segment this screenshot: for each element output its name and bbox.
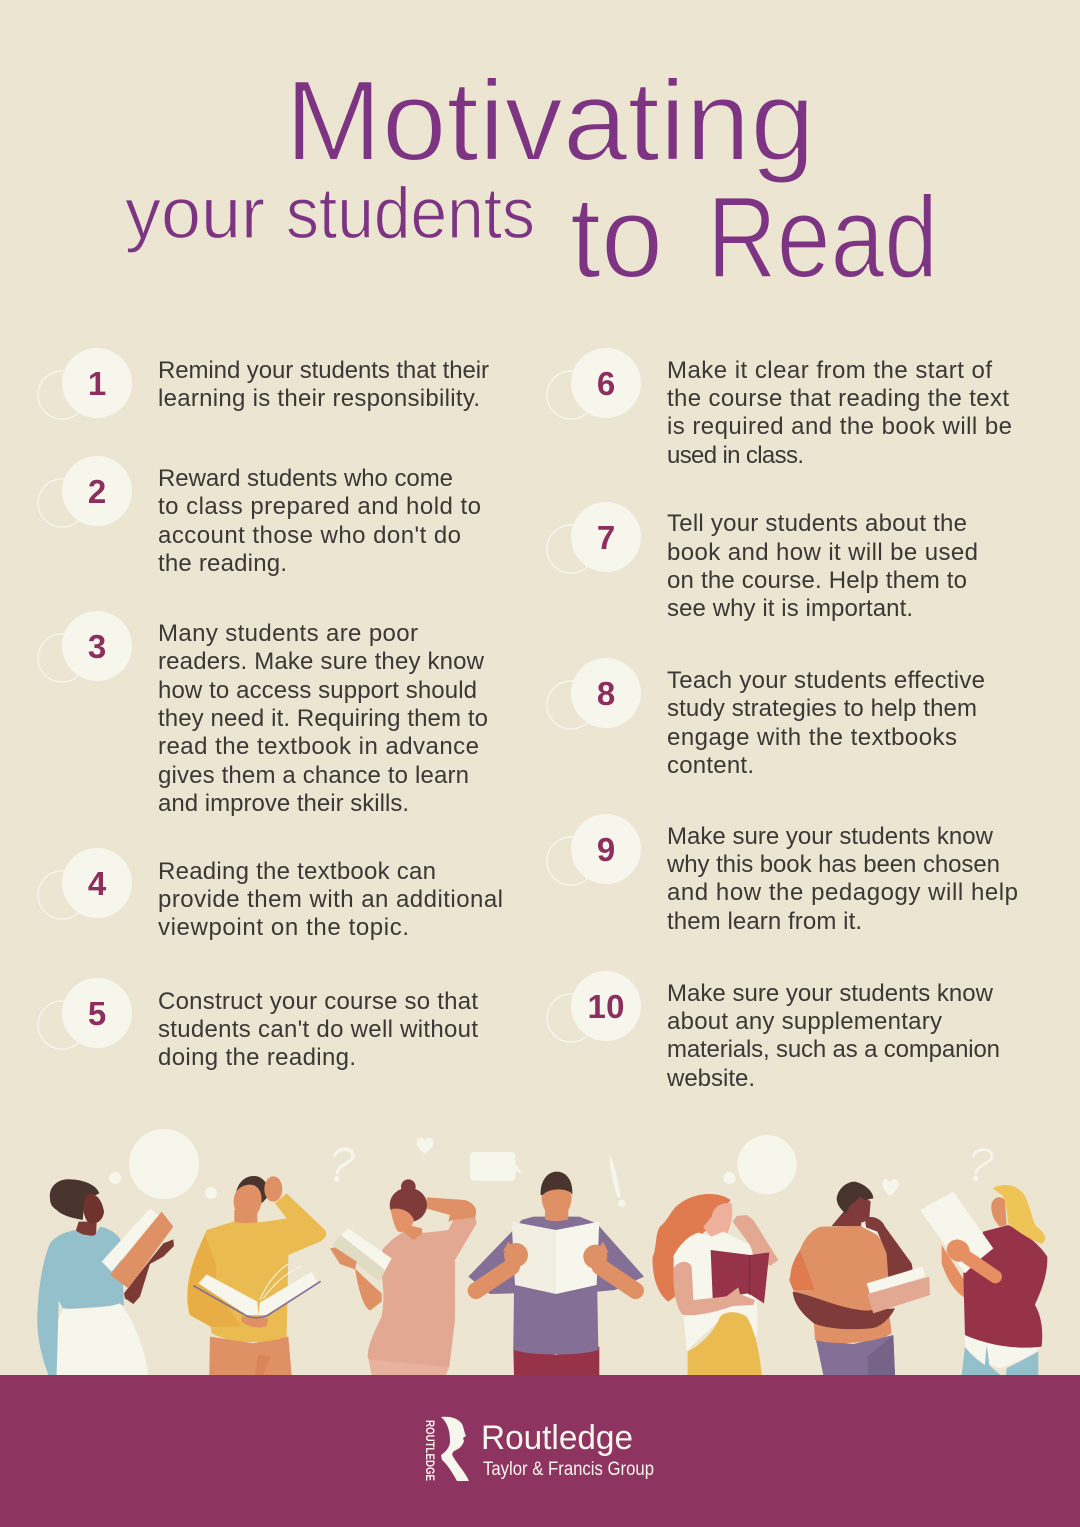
icon: number badge 2	[38, 456, 132, 527]
text: tip 3: read the textbook in advance	[158, 733, 479, 760]
text: tip 2: Reward students who come	[158, 465, 453, 492]
text: tip 1	[158, 357, 489, 412]
text: tip 10	[666, 980, 1000, 1092]
icon: number badge 1: 1	[88, 365, 106, 402]
logo: Routledge: ROUTLEDGE	[423, 1420, 435, 1481]
title: Motivating	[285, 58, 815, 185]
text: tip 3: how to access support should	[158, 677, 477, 704]
icon: question mark right	[973, 1150, 992, 1180]
text: tip 5: Construct your course so that	[158, 988, 478, 1015]
figure: woman in maroon reading paper	[920, 1185, 1047, 1375]
text: tip 3: gives them a chance to learn	[158, 762, 469, 789]
text: tip 2	[158, 465, 481, 577]
icon: thought bubble left	[109, 1129, 217, 1199]
icon: number badge 4: 4	[88, 865, 107, 902]
icon: question mark centre	[335, 1149, 353, 1180]
text: tip 3: they need it. Requiring them to	[158, 705, 488, 732]
text: tip 6: Make it clear from the start of	[667, 357, 992, 384]
text: tip 4: Reading the textbook can	[158, 858, 436, 885]
figure: man in orange thinking	[789, 1182, 930, 1375]
icon: heart right	[882, 1179, 899, 1196]
text: tip 4: viewpoint on the topic.	[158, 914, 409, 941]
icon: number badge 1	[38, 348, 132, 419]
icon: number badge 5: 5	[88, 995, 106, 1032]
logo: Routledge	[423, 1417, 654, 1481]
figure: woman in white with maroon book	[653, 1194, 778, 1375]
title	[125, 58, 938, 302]
icon: number badge 10	[547, 971, 641, 1042]
text: tip 9	[666, 823, 1018, 935]
icon: number badge 3	[38, 611, 132, 682]
panel: tip 3	[38, 611, 488, 817]
figure: man in yellow scratching head	[187, 1176, 326, 1375]
text: tip 7: book and how it will be used	[667, 539, 978, 566]
panel: tip 8	[547, 658, 985, 779]
icon: question mark left	[335, 1150, 353, 1180]
icon: number badge 7	[547, 502, 641, 573]
text: tip 4	[158, 858, 503, 941]
text: tip 10: about any supplementary	[667, 1008, 942, 1035]
text: tip 5: students can't do well without	[158, 1016, 478, 1043]
icon: number badge 2: 2	[88, 473, 106, 510]
icon: exclamation mark	[609, 1154, 625, 1207]
icon: number badge 9	[547, 814, 641, 885]
text: tip 5	[158, 988, 478, 1071]
title: to	[570, 172, 663, 302]
icon: number badge 7: 7	[597, 519, 615, 556]
text: tip 4: provide them with an additional	[158, 886, 503, 913]
footer band	[0, 1375, 1080, 1527]
text: tip 7: Tell your students about the	[667, 510, 967, 537]
text: tip 3: readers. Make sure they know	[158, 648, 485, 675]
title: your	[125, 174, 265, 254]
icon: number badge 10: 10	[588, 988, 624, 1025]
title: Read	[707, 172, 938, 302]
panel: tip 6	[547, 348, 1012, 469]
icon: number badge 6: 6	[597, 365, 615, 402]
text: tip 9: and how the pedagogy will help	[667, 879, 1018, 906]
text: tip 9: why this book has been chosen	[666, 851, 1000, 878]
icon: heart	[417, 1138, 433, 1154]
text: tip 6: is required and the book will be	[667, 413, 1012, 440]
icon: speech bubble	[470, 1152, 522, 1181]
panel: tip 10	[547, 971, 1000, 1092]
icon: number badge 9: 9	[597, 831, 615, 868]
text: tip 10: website.	[666, 1065, 755, 1092]
panel: tip 1	[38, 348, 489, 419]
text: tip 8: study strategies to help them	[667, 695, 977, 722]
text: tip 7: see why it is important.	[667, 595, 913, 622]
text: tip 7	[667, 510, 978, 622]
text: tip 2: account those who don't do	[158, 522, 461, 549]
text: tip 3: Many students are poor	[158, 620, 418, 647]
icon: thought bubble right	[723, 1135, 797, 1194]
text: tip 6: the course that reading the text	[667, 385, 1009, 412]
text: tip 7: on the course. Help them to	[667, 567, 967, 594]
text: tip 2: to class prepared and hold to	[158, 493, 481, 520]
logo: Routledge: Routledge	[481, 1419, 633, 1457]
text: tip 9: Make sure your students know	[667, 823, 994, 850]
icon: number badge 6	[547, 348, 641, 419]
text: tip 6: used in class.	[667, 442, 804, 469]
text: tip 8	[667, 667, 985, 779]
text: tip 1: learning is their responsibility.	[158, 385, 480, 412]
text: tip 1: Remind your students that their	[158, 357, 489, 384]
panel: tip 4	[38, 848, 503, 941]
text: tip 8: content.	[667, 752, 754, 779]
figure: woman in pink with hand on head	[330, 1179, 477, 1375]
panel: tip 5	[38, 978, 478, 1071]
figure: man in purple with large book	[468, 1172, 644, 1375]
text: tip 3: and improve their skills.	[158, 790, 409, 817]
icon: number badge 8	[547, 658, 641, 729]
text: tip 2: the reading.	[158, 550, 287, 577]
icon: number badge 4	[38, 848, 132, 919]
text: tip 9: them learn from it.	[667, 908, 862, 935]
logo: Routledge: Taylor & Francis Group	[483, 1459, 654, 1480]
icon: number badge 5	[38, 978, 132, 1049]
icon: number badge 8: 8	[597, 675, 615, 712]
text: tip 8: Teach your students effective	[667, 667, 985, 694]
panel: tip 9	[547, 814, 1018, 935]
text: tip 8: engage with the textbooks	[667, 724, 957, 751]
panel: tip 7	[547, 502, 978, 622]
text: tip 10: Make sure your students know	[667, 980, 994, 1007]
text: tip 3	[158, 620, 488, 817]
figure: woman in blue reading	[37, 1179, 174, 1375]
panel: tip 2	[38, 456, 481, 577]
title: students	[286, 174, 535, 254]
text: tip 10: materials, such as a companion	[667, 1036, 1000, 1063]
text: tip 6	[667, 357, 1012, 469]
text: tip 5: doing the reading.	[158, 1044, 356, 1071]
icon: number badge 3: 3	[88, 628, 106, 665]
